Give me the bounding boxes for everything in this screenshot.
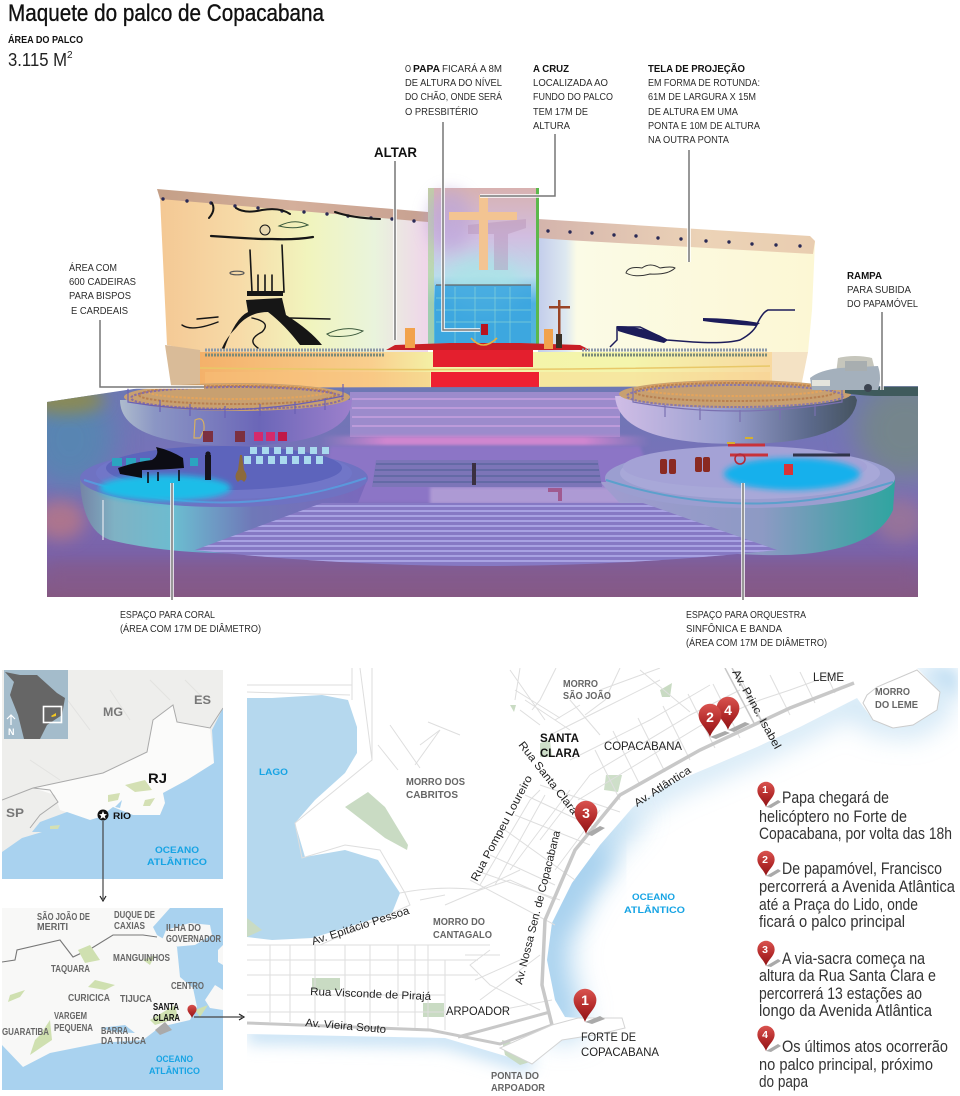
labels: ATLÂNTICO — [624, 904, 685, 916]
platform — [200, 352, 772, 392]
labels: ARPOADOR — [491, 1082, 545, 1094]
labels: SANTA — [540, 731, 579, 745]
legend item 4: do papa — [759, 1073, 809, 1091]
map labels: MG — [103, 705, 123, 719]
front stairs — [195, 503, 776, 566]
labels: SÃO JOÃO DE — [37, 910, 90, 923]
callout leader lines — [100, 122, 882, 600]
RJ land — [33, 705, 214, 820]
human figure — [472, 463, 476, 485]
labels: GUARATIBA — [2, 1027, 49, 1038]
callout: orquestra — [686, 610, 827, 649]
callout: tela de projeção: DE ALTURA EM UMA — [648, 107, 738, 118]
ocean gradient — [247, 668, 958, 1064]
callout: orquestra: SINFÔNICA E BANDA — [686, 622, 782, 635]
glass backdrop — [435, 285, 531, 343]
labels: CABRITOS — [406, 789, 458, 801]
callout: papa: FICARÁ A 8M — [442, 62, 502, 75]
legend item 2: 2 — [762, 854, 768, 866]
street names: Av. Epitácio Pessoa — [310, 905, 412, 948]
middle stairs — [372, 460, 602, 487]
callout: orquestra: (ÁREA COM 17M DE DIÂMETRO) — [686, 636, 827, 649]
callout: rampa: PARA SUBIDA — [847, 285, 911, 296]
floor — [47, 386, 918, 597]
street names: Rua Visconde de Pirajá — [310, 986, 432, 1003]
street network — [247, 668, 840, 1030]
callout: cadeiras: E CARDEAIS — [71, 306, 128, 317]
callout: cruz — [533, 64, 613, 132]
piano — [118, 447, 184, 478]
callout: tela de projeção: TELA DE PROJEÇÃO — [648, 62, 745, 75]
popemobile and ramp — [810, 356, 918, 396]
labels: FORTE DE — [581, 1030, 636, 1044]
chairs on platform — [205, 350, 768, 355]
map: Copacabana detail — [247, 668, 958, 1094]
labels: COPACABANA — [604, 739, 682, 753]
callout: rampa: DO PAPAMÓVEL — [847, 297, 918, 310]
Christ the Redeemer drawing — [182, 203, 380, 350]
arrow: city to neighbourhood — [194, 1014, 244, 1020]
labels: MERITI — [37, 922, 68, 933]
labels: DUQUE DE — [114, 910, 155, 921]
labels: MORRO — [563, 678, 598, 690]
legend item 4 — [757, 1026, 948, 1091]
callout: cruz: A CRUZ — [533, 64, 569, 75]
callout: coral — [120, 610, 261, 635]
pin 3 — [575, 801, 605, 836]
legend item 3: A via-sacra começa na — [782, 950, 926, 968]
stage area stat: 3.115 M — [8, 50, 67, 70]
callout: papa: PAPA — [413, 64, 440, 75]
title: Maquete do palco de Copacabana — [8, 0, 325, 27]
map labels: RIO — [113, 811, 131, 821]
screen pillars — [165, 345, 205, 392]
river drawing — [610, 310, 795, 347]
labels — [259, 670, 918, 1094]
legend item 2: até a Praça do Lido, onde — [759, 896, 918, 914]
street names: Av. Nossa Sen. de Copacabana — [513, 829, 563, 986]
pin 1: 1 — [581, 992, 589, 1008]
legend item 1: Papa chegará de — [782, 789, 889, 807]
labels: SÃO JOÃO — [563, 689, 611, 702]
legend item 4: no palco principal, próximo — [759, 1056, 933, 1074]
pin 4 — [717, 697, 750, 732]
legend item 1 — [757, 782, 952, 843]
labels: PEQUENA — [54, 1023, 93, 1034]
stage area stat: ÁREA DO PALCO — [8, 33, 83, 46]
callout: tela de projeção: 61M DE LARGURA X 15M — [648, 92, 756, 103]
legend item 3: percorrerá 13 estações ao — [759, 985, 922, 1003]
legend item 3 — [757, 941, 936, 1020]
inset: South America: N — [8, 727, 14, 737]
lake — [247, 695, 400, 940]
callout: coral: (ÁREA COM 17M DE DIÂMETRO) — [120, 622, 261, 635]
labels: TAQUARA — [51, 964, 90, 975]
labels: OCEANO — [156, 1054, 193, 1065]
labels: MANGUINHOS — [113, 953, 170, 964]
labels: LAGO — [259, 767, 288, 778]
labels: OCEANO — [632, 892, 675, 903]
labels: PONTA DO — [491, 1070, 539, 1082]
parks — [312, 792, 530, 1065]
stage illustration — [25, 122, 955, 600]
street names: Av. Vieira Souto — [305, 1017, 386, 1036]
labels: VARGEM — [54, 1011, 87, 1022]
callout: altar: ALTAR — [374, 145, 417, 160]
callout: cruz: ALTURA — [533, 121, 570, 132]
pin 1 — [574, 989, 605, 1024]
legend item 4: 4 — [762, 1029, 768, 1041]
callout: cruz: FUNDO DO PALCO — [533, 92, 613, 103]
legend item 2: ficará o palco principal — [759, 913, 905, 931]
stage area stat — [8, 33, 83, 70]
central tower — [428, 188, 539, 348]
labels: DO LEME — [875, 699, 918, 711]
callout: papa: DO CHÃO, ONDE SERÁ — [405, 90, 502, 103]
labels: MORRO — [875, 686, 910, 698]
left projection screen — [157, 189, 428, 352]
labels: GOVERNADOR — [166, 934, 222, 945]
labels: CLARA — [153, 1013, 180, 1024]
icon: Rio star marker — [98, 810, 108, 820]
arrow: state to city — [100, 821, 106, 901]
callout: cadeiras — [69, 261, 136, 317]
drums and instruments — [660, 457, 710, 474]
back stairs — [350, 392, 620, 437]
central floor — [320, 446, 660, 503]
inset: South America — [4, 670, 68, 739]
map labels: ATLÂNTICO — [147, 856, 207, 868]
map labels: OCEANO — [155, 845, 199, 856]
labels: CLARA — [540, 746, 580, 760]
callout: papa: O PRESBITÉRIO — [405, 105, 478, 118]
upper left round stage — [120, 383, 352, 446]
callout: papa — [405, 62, 502, 118]
labels: SANTA — [153, 1002, 179, 1013]
legend item 1: helicóptero no Forte de — [759, 808, 907, 826]
street names — [305, 668, 783, 1036]
legend item 1: 1 — [762, 784, 768, 796]
labels: CURICICA — [68, 993, 110, 1004]
labels: ATLÂNTICO — [149, 1065, 200, 1077]
labels: TIJUCA — [120, 994, 152, 1005]
callout: cruz: TEM 17M DE — [533, 107, 588, 118]
red carpet and altar — [386, 300, 590, 392]
icon: pin Santa Clara — [187, 1005, 197, 1018]
callout: orquestra: ESPAÇO PARA ORQUESTRA — [686, 610, 806, 621]
callout: cadeiras: ÁREA COM — [69, 261, 117, 274]
street names: Av. Atlântica — [632, 764, 694, 810]
harp and cello — [194, 419, 204, 438]
callout: cruz: LOCALIZADA AO — [533, 78, 608, 89]
callout: tela de projeção — [648, 62, 760, 146]
Morro do Leme — [863, 670, 940, 728]
callout: cadeiras: 600 CADEIRAS — [69, 277, 136, 288]
orchestra stage — [600, 438, 895, 555]
callout: tela de projeção: PONTA E 10M DE ALTURA — [648, 121, 760, 132]
street names: Rua Pompeu Loureiro — [469, 774, 535, 883]
upper right round stage — [615, 380, 857, 444]
legend item 3: longo da Avenida Atlântica — [759, 1002, 933, 1020]
labels: MORRO DO — [433, 916, 485, 928]
percussion — [203, 431, 245, 442]
labels: CENTRO — [171, 981, 204, 992]
map labels: RJ — [148, 770, 167, 786]
callout: tela de projeção: NA OUTRA PONTA — [648, 135, 729, 146]
choir stage — [80, 419, 368, 553]
labels: BARRA — [101, 1026, 128, 1037]
labels: ILHA DO — [166, 923, 201, 934]
stage area stat: 2 — [67, 50, 73, 61]
labels: LEME — [813, 670, 844, 684]
map labels: SP — [6, 806, 24, 820]
labels: DA TIJUCA — [101, 1036, 146, 1047]
callout: papa: DE ALTURA DO NÍVEL — [405, 76, 502, 89]
callout: tela de projeção: EM FORMA DE ROTUNDA: — [648, 78, 760, 89]
pin 4: 4 — [724, 702, 732, 718]
main roads — [247, 668, 854, 1044]
pin 2 — [699, 704, 730, 739]
Forte headland — [500, 1018, 625, 1064]
labels: ARPOADOR — [446, 1004, 510, 1018]
labels: CAXIAS — [114, 921, 145, 932]
callout: coral: ESPAÇO PARA CORAL — [120, 610, 215, 621]
callout: rampa — [847, 271, 918, 310]
map labels: ES — [194, 693, 211, 707]
map: state of Rio de Janeiro — [2, 670, 224, 880]
legend item 3: altura da Rua Santa Clara e — [759, 967, 936, 985]
labels: CANTAGALO — [433, 929, 492, 941]
callout: rampa: RAMPA — [847, 271, 882, 282]
street names: Av. Princ. Isabel — [729, 668, 783, 751]
labels — [2, 910, 222, 1077]
labels: MORRO DOS — [406, 776, 465, 788]
map: city of Rio de Janeiro — [2, 908, 223, 1090]
legend item 3: 3 — [762, 944, 768, 956]
pin 2: 2 — [706, 709, 714, 725]
callout: cadeiras: PARA BISPOS — [69, 291, 131, 302]
map labels — [6, 693, 211, 868]
choir chairs — [112, 447, 329, 466]
cross — [449, 195, 517, 270]
street names: Rua Santa Clara — [516, 739, 580, 818]
labels: COPACABANA — [581, 1045, 659, 1059]
legend item 2 — [757, 851, 956, 931]
callout: papa: O — [405, 64, 411, 75]
right projection screen — [538, 219, 815, 352]
pin 3: 3 — [582, 805, 590, 821]
